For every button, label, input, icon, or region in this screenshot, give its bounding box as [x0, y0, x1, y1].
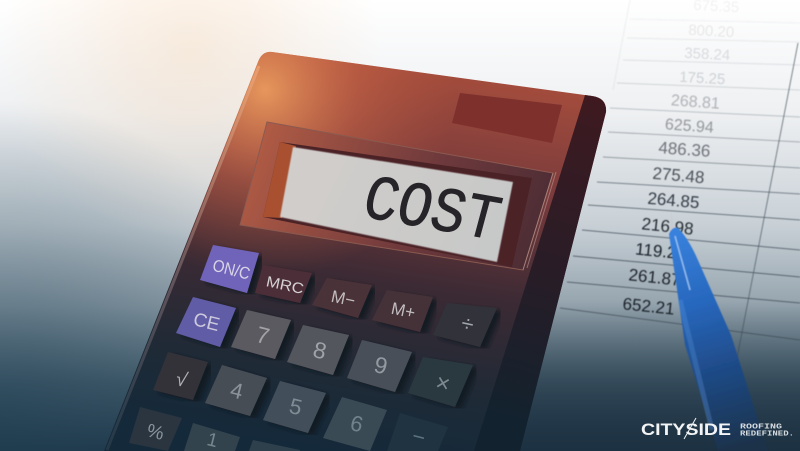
LCD word COST: COST — [355, 166, 507, 259]
column of figures: 264.85 — [647, 189, 700, 212]
logo slash mark — [684, 418, 696, 439]
column of figures: 625.94 — [664, 116, 714, 137]
column of figures — [622, 0, 740, 319]
display bezel — [240, 122, 556, 270]
key 6 — [323, 397, 387, 451]
key divide — [433, 303, 497, 347]
logo tagline: ROOFING — [740, 424, 782, 432]
column of figures: 275.48 — [652, 164, 705, 187]
column of figures: 261.87 — [628, 265, 681, 290]
key 4: 4 — [228, 377, 246, 404]
logo wordmark: CITYSIDE — [641, 420, 731, 439]
key MRC: MRC — [265, 273, 305, 298]
key divide: ÷ — [459, 310, 476, 337]
key 9 — [347, 340, 412, 392]
key CE — [176, 297, 236, 347]
solar panel — [452, 93, 562, 143]
key CE: CE — [191, 309, 222, 336]
logo tagline — [740, 424, 794, 438]
key M+: M+ — [389, 299, 417, 322]
key 8: 8 — [311, 336, 329, 364]
key 2 — [249, 440, 300, 451]
calculator — [104, 52, 606, 451]
key 5 — [263, 381, 326, 433]
key percent: % — [145, 420, 166, 445]
key 6: 6 — [348, 410, 366, 437]
key M-: M− — [329, 287, 357, 310]
key 7: 7 — [254, 321, 272, 349]
bottom shading over paper — [520, 300, 800, 451]
key minus: − — [410, 423, 428, 450]
key 7 — [231, 310, 291, 359]
key 4 — [205, 365, 267, 416]
column of figures: 486.36 — [658, 138, 711, 161]
key ON/C — [200, 245, 259, 293]
column of figures: 800.20 — [688, 22, 735, 41]
blue pen — [669, 212, 768, 451]
key M- — [312, 278, 372, 318]
logo tagline: REDEFINED. — [740, 430, 794, 438]
key times: × — [433, 369, 453, 399]
key ON/C: ON/C — [211, 256, 252, 283]
column of figures: 119.24 — [634, 239, 687, 264]
key 9: 9 — [372, 351, 390, 379]
column of figures: 652.21 — [622, 294, 675, 319]
LCD screen — [280, 147, 513, 262]
column of figures: 358.24 — [684, 45, 731, 64]
key root: √ — [173, 368, 189, 392]
key 1 — [184, 423, 240, 451]
key MRC — [255, 265, 312, 303]
key times — [408, 357, 473, 407]
key percent — [129, 407, 182, 451]
column of figures: 216.98 — [641, 214, 694, 239]
keypad — [129, 245, 497, 451]
key root — [153, 352, 208, 400]
logo: Cityside — [641, 418, 794, 439]
key minus — [387, 413, 448, 451]
calculator body — [104, 52, 606, 451]
column of figures: 268.81 — [670, 92, 720, 113]
column of figures: 175.25 — [679, 69, 726, 88]
key 8 — [287, 325, 349, 375]
key 5: 5 — [287, 393, 305, 420]
spreadsheet table — [560, 0, 800, 420]
key M+ — [372, 290, 433, 332]
